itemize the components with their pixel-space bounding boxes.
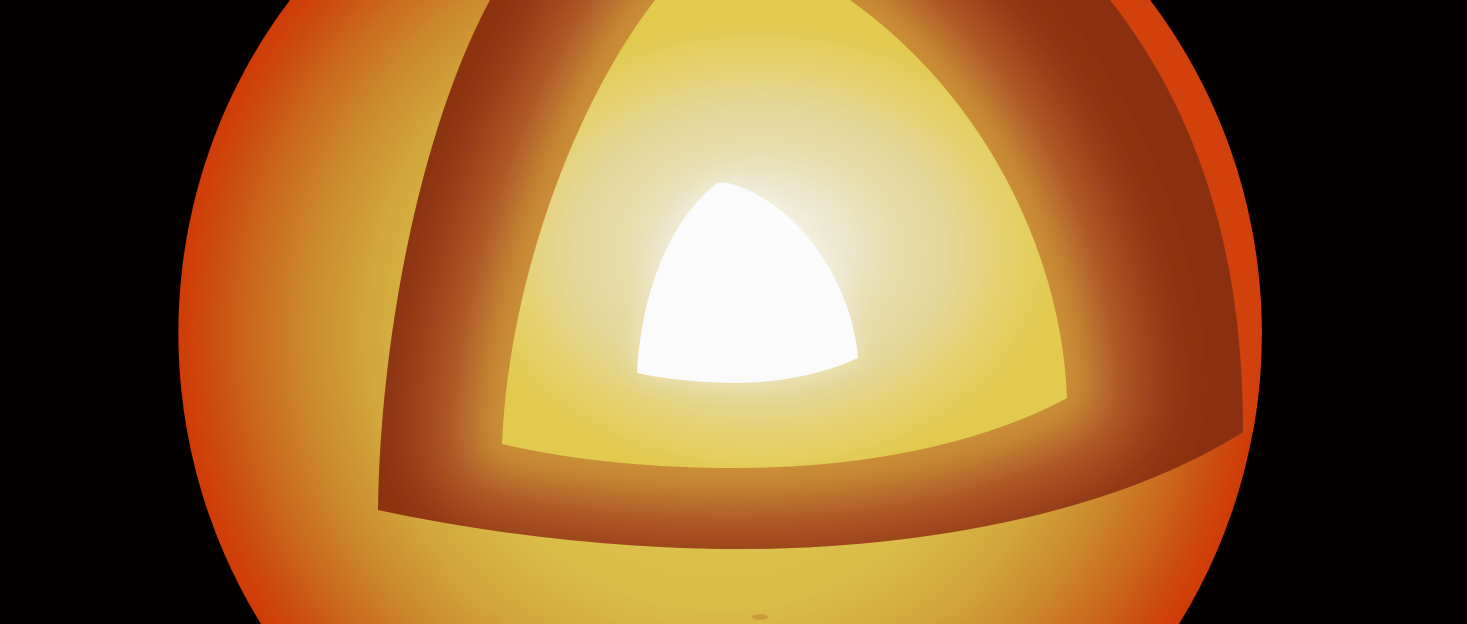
outer sphere [178,0,1262,624]
surface spot [752,614,768,620]
convection zone wedge [370,0,1250,552]
illustration: cutaway of a star [178,0,1262,624]
core glow [637,182,858,383]
core [637,182,858,383]
red rim on the right of the cut [1110,0,1262,432]
radiative zone wedge [502,0,1067,468]
